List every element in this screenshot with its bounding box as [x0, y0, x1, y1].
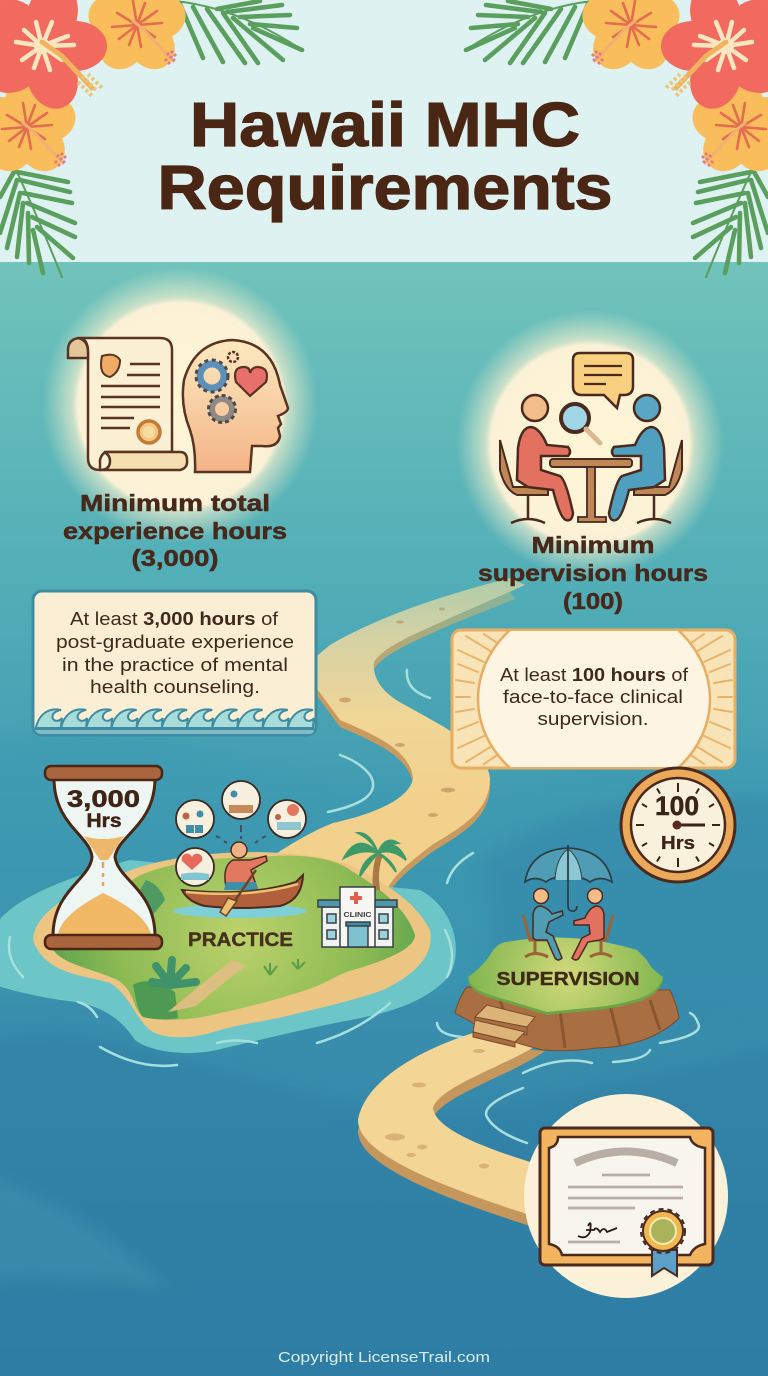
panel: practice island [0, 781, 456, 1053]
icon: clinic building [318, 887, 397, 947]
sand path: upper [277, 578, 525, 912]
hourglass label [67, 786, 140, 832]
icon: thought bubbles [176, 781, 306, 886]
fern [152, 960, 196, 985]
icon: hourglass 3,000 hrs [45, 766, 162, 949]
panel: 3,000 hours callout: At least 3,000 hours of [70, 609, 279, 629]
panel: 100 hours callout [450, 628, 736, 770]
heading: minimum supervision hours [478, 532, 708, 614]
heading: minimum total experience hours: experience hours [63, 518, 287, 544]
title: Hawaii MHC [190, 91, 580, 160]
heading: minimum supervision hours: (100) [563, 588, 623, 614]
panel: 3,000 hours callout [33, 591, 316, 735]
icon: clinic building: CLINIC [344, 910, 372, 919]
panel: 3,000 hours callout: in the practice of mental [62, 655, 288, 675]
background sky [0, 0, 768, 262]
water ellipse under canoe [173, 904, 307, 918]
icon: canoe with paddler [182, 842, 303, 916]
icon: license certificate [524, 1094, 728, 1298]
heading: minimum total experience hours: Minimum total [80, 490, 270, 516]
icon: supervision meeting [456, 310, 724, 578]
title [158, 91, 612, 223]
supervision label: SUPERVISION [496, 968, 640, 989]
panel: 100 hours callout: supervision. [538, 709, 648, 729]
practice label: PRACTICE [188, 930, 293, 951]
panel: 100 hours callout: At least 100 hours of [500, 665, 689, 685]
top right floral decoration [466, 0, 768, 277]
sand path: lower [358, 1033, 545, 1226]
hourglass label: Hrs [86, 811, 122, 832]
hourglass label: 3,000 [67, 786, 140, 813]
icon: 100 hrs clock [621, 768, 735, 882]
panel: supervision island [455, 845, 679, 1051]
title: Requirements [158, 154, 612, 223]
icon: scroll and head [42, 267, 318, 543]
heading: minimum supervision hours: Minimum [532, 532, 654, 558]
wave border [35, 709, 314, 734]
heading: minimum total experience hours: (3,000) [132, 545, 218, 571]
top left floral decoration [0, 0, 302, 277]
icon: 100 hrs clock: 100 [655, 791, 699, 821]
icon: palm tree [344, 833, 406, 890]
icon: 100 hrs clock: Hrs [661, 833, 695, 853]
head profile [183, 340, 288, 472]
heading: minimum total experience hours [63, 490, 287, 571]
water ripples [9, 670, 699, 1143]
steps [473, 1005, 535, 1047]
heading: minimum supervision hours: supervision hours [478, 560, 708, 586]
copyright footer: Copyright LicenseTrail.com [278, 1349, 490, 1366]
panel: 3,000 hours callout: post-graduate experience [56, 632, 294, 652]
panel: 3,000 hours callout: health counseling. [90, 677, 260, 697]
panel: 100 hours callout: face-to-face clinical [503, 687, 683, 707]
icon: umbrella with two people [523, 845, 613, 960]
